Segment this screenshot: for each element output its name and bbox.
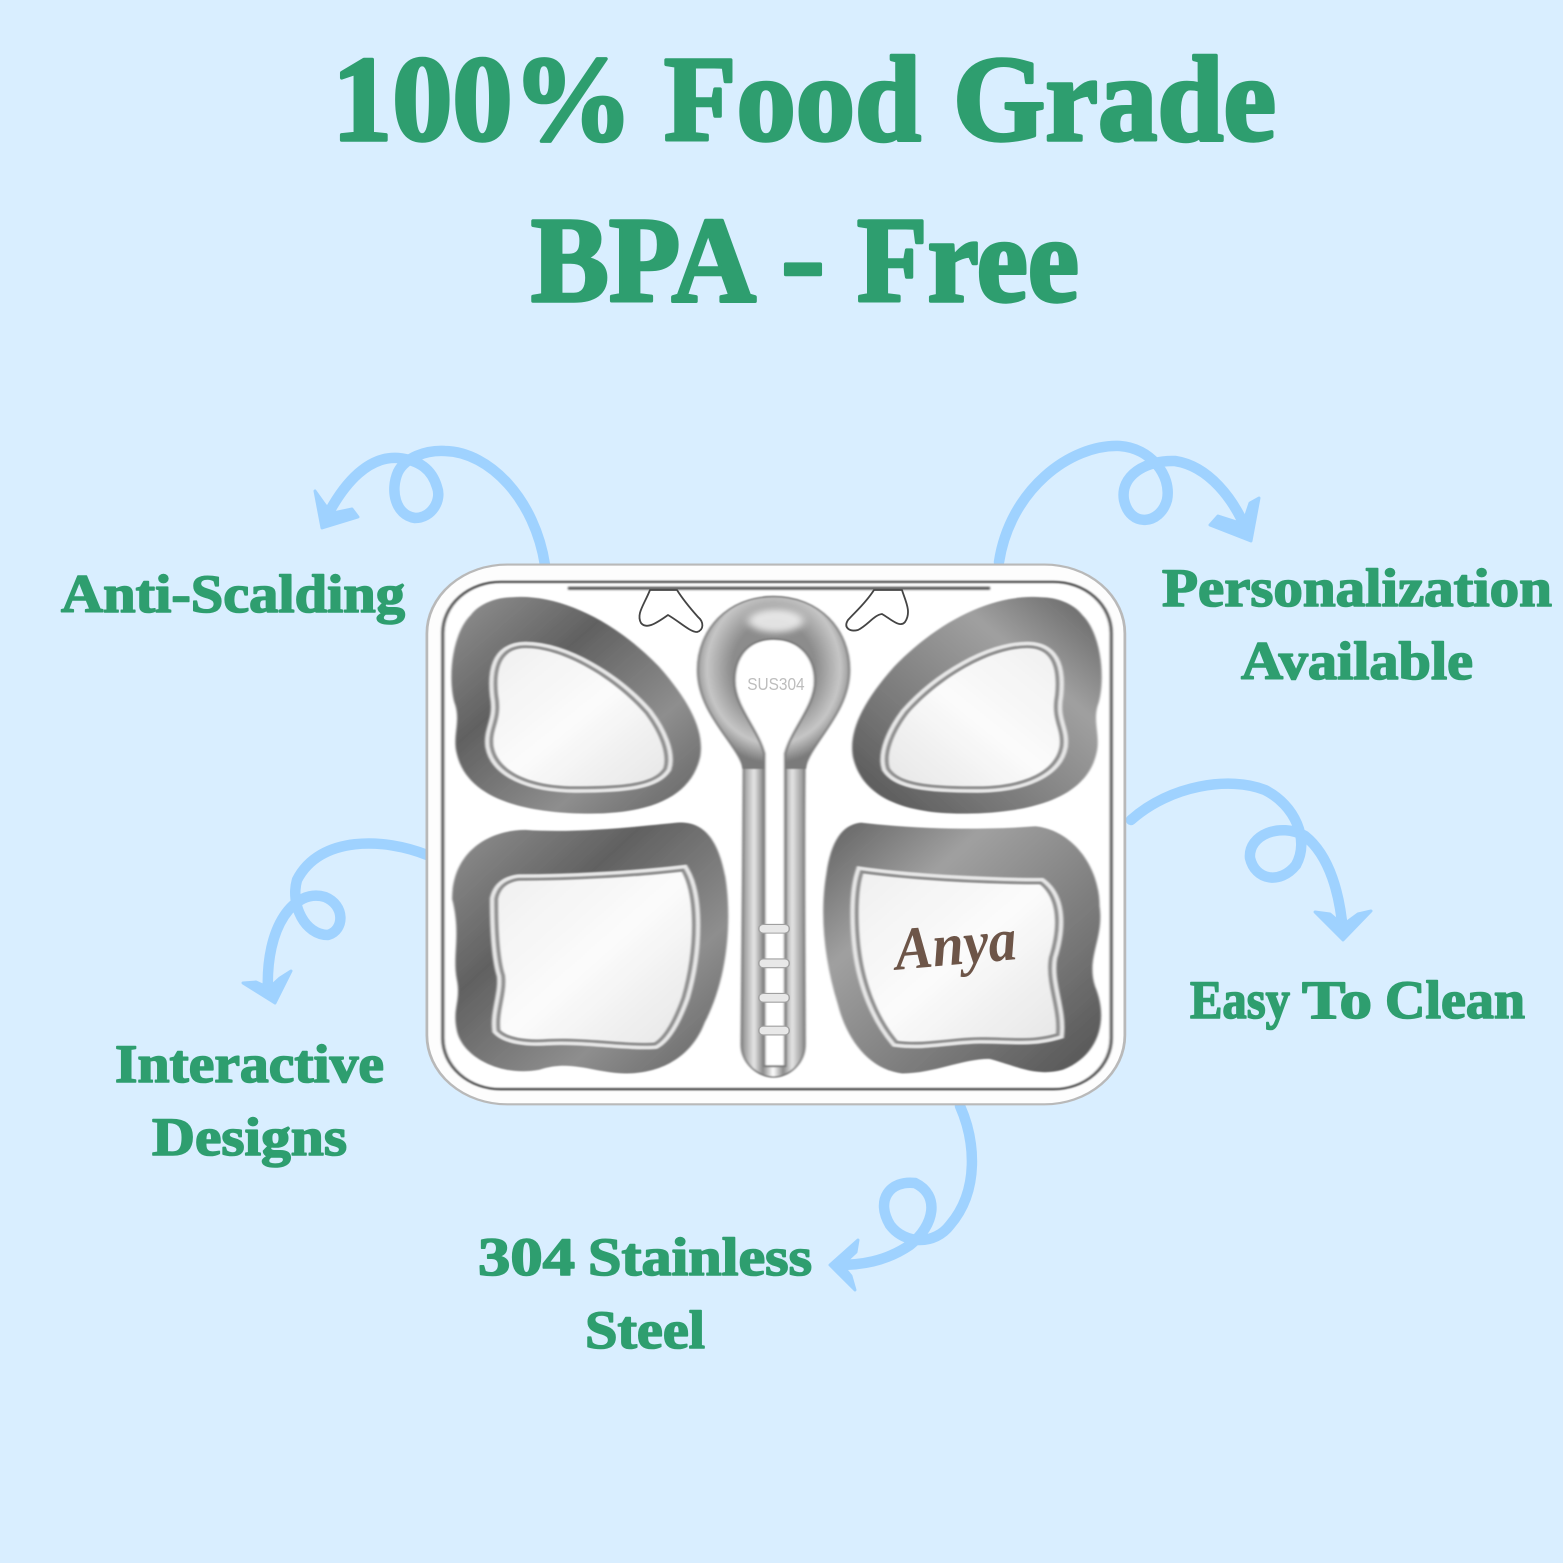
spoon centre highlight <box>735 639 815 1066</box>
hook slots <box>639 590 908 632</box>
title: Grade <box>953 32 1276 167</box>
arrow: to Interactive Designs <box>243 843 427 1003</box>
bowl highlight <box>748 609 803 633</box>
label: 304 Stainless Steel: Stainless <box>588 1227 812 1287</box>
label: Easy To Clean: Clean <box>1385 970 1525 1030</box>
title <box>332 32 1276 328</box>
label: Interactive Designs: Interactive <box>115 1034 384 1094</box>
compartment: bottom right <box>823 823 1101 1073</box>
title: Free <box>857 193 1079 328</box>
arrow: to Anti-Scalding <box>315 451 545 565</box>
label: Easy To Clean <box>1190 970 1525 1030</box>
label: Interactive Designs: Designs <box>152 1107 347 1167</box>
title: 100% <box>332 32 633 167</box>
top band shadow <box>568 587 990 590</box>
spoon <box>698 597 849 1077</box>
handle ridges <box>759 924 789 1035</box>
compartment: top left <box>451 597 701 814</box>
tray rim <box>427 565 1125 1104</box>
label: Personalization Available: Available <box>1241 631 1473 691</box>
compartment: top right <box>852 597 1102 814</box>
tray photo <box>427 565 1125 1104</box>
label: 304 Stainless Steel: 304 <box>478 1227 575 1287</box>
label: Personalization Available: Personalization <box>1162 558 1552 618</box>
label: Personalization Available <box>1162 558 1552 691</box>
compartment: bottom left <box>452 823 728 1073</box>
arrow: to Easy To Clean <box>1131 784 1371 940</box>
stamped text: SUS304 <box>747 674 805 694</box>
personalized name: Anya <box>888 906 1019 984</box>
label: Easy To Clean: Easy <box>1190 970 1290 1030</box>
label: Anti-Scalding: Anti-Scalding <box>61 564 405 624</box>
title: - <box>781 190 825 325</box>
label: Easy To Clean: To <box>1302 970 1372 1030</box>
label: 304 Stainless Steel <box>478 1227 812 1360</box>
arrow: to 304 Stainless Steel <box>830 1106 972 1290</box>
title: Food <box>664 32 921 167</box>
label: 304 Stainless Steel: Steel <box>585 1300 705 1360</box>
arrow: to Personalization <box>999 446 1259 562</box>
spoon bowl <box>698 597 849 768</box>
title: BPA <box>531 193 756 328</box>
spoon handle <box>741 754 805 1077</box>
label: Interactive Designs <box>115 1034 384 1167</box>
